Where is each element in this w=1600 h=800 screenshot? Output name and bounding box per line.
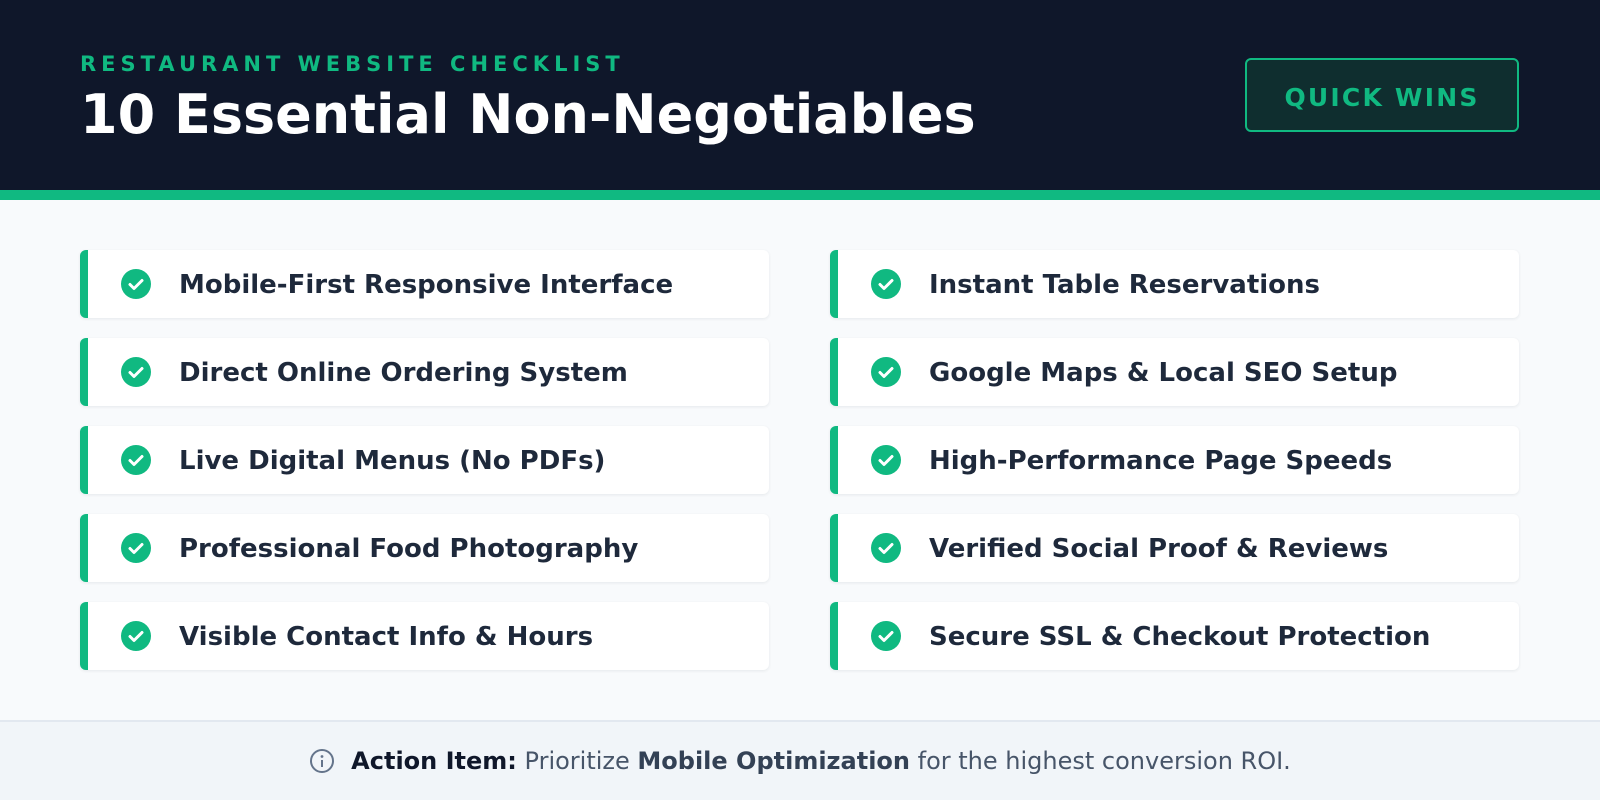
footer: [0, 720, 1600, 800]
card 8: [830, 514, 1519, 582]
card 6: High-Performance Page Speeds: [929, 446, 1392, 476]
card 1: [80, 250, 769, 318]
card 6: [830, 426, 1519, 494]
card 1: Mobile-First Responsive Interface: [179, 270, 673, 300]
subtitle: RESTAURANT WEBSITE CHECKLIST: [80, 52, 625, 76]
card 3: Direct Online Ordering System: [179, 358, 628, 388]
header: [0, 0, 1600, 190]
card 4: Google Maps & Local SEO Setup: [929, 358, 1397, 388]
card 10: [830, 602, 1519, 670]
card 7: Professional Food Photography: [179, 534, 638, 564]
card 10: Secure SSL & Checkout Protection: [929, 622, 1430, 652]
card 3: [80, 338, 769, 406]
card 2: Instant Table Reservations: [929, 270, 1320, 300]
card 2: [830, 250, 1519, 318]
title: 10 Essential Non-Negotiables: [80, 83, 976, 146]
card 9: Visible Contact Info & Hours: [179, 622, 593, 652]
badge: quick wins: QUICK WINS: [1284, 83, 1480, 112]
card 5: Live Digital Menus (No PDFs): [179, 446, 605, 476]
badge: quick wins: [1245, 58, 1519, 132]
card 7: [80, 514, 769, 582]
card 5: [80, 426, 769, 494]
card 9: [80, 602, 769, 670]
card 8: Verified Social Proof & Reviews: [929, 534, 1388, 564]
footer text: Action Item:: [351, 747, 517, 775]
card 4: [830, 338, 1519, 406]
footer text: Mobile Optimization: [637, 747, 910, 775]
footer text: Prioritize for the highest conversion ROI.: [525, 747, 1291, 775]
